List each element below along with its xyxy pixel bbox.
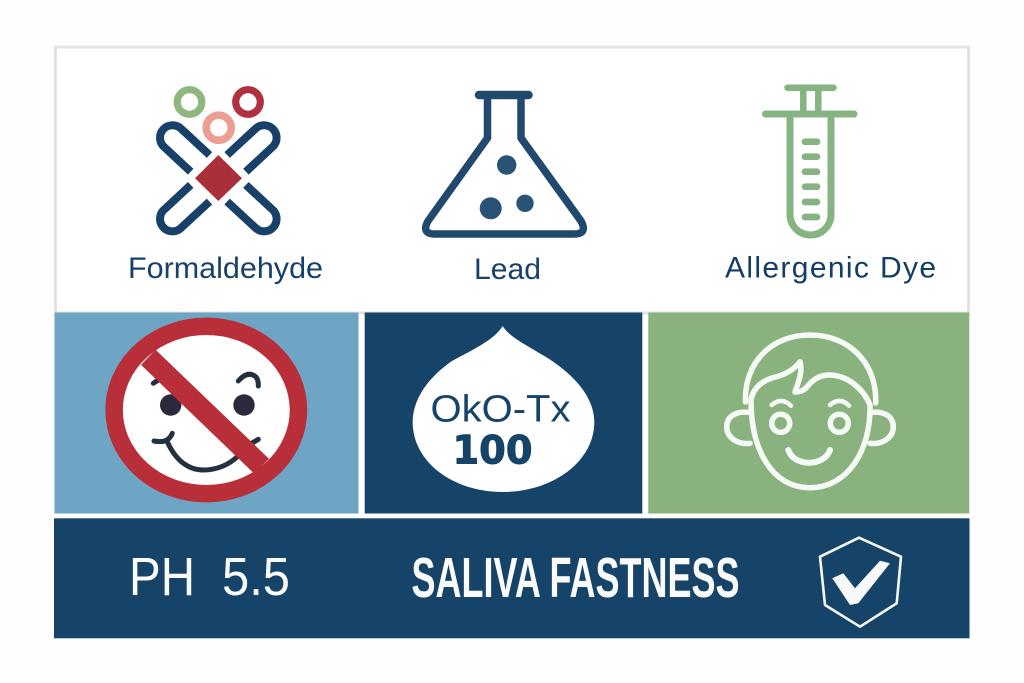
label: Lead: Lead [474,253,541,286]
brows [772,401,791,406]
icon: green ring [177,90,202,114]
icon: child face [727,335,893,488]
panel: no-face blue [54,312,358,514]
label: PH 5.5: 5.5 [222,547,290,607]
label: PH 5.5 [129,547,290,607]
label: PH 5.5: PH [129,547,195,607]
icon: prohibited smiley [114,326,298,494]
icon: pink ring [206,115,231,140]
smile [788,450,830,463]
panel: navy drop [365,312,642,514]
icon: white drop [413,326,594,492]
panel: bottom band [54,518,970,638]
label: Allergenic Dye: Allergenic Dye [725,252,936,284]
smiley features [153,374,258,470]
icon: crossed capsule arms [160,125,277,231]
panel: top white frame [56,47,968,313]
hair outline [745,335,876,403]
icon: red diamond [195,155,242,201]
prohibition ring and slash [114,326,298,494]
panel: green child [648,312,969,514]
label: SALIVA FASTNESS: SALIVA FASTNESS [412,546,740,610]
icon: flask [426,95,583,234]
icon group: formaldehyde [160,90,277,231]
hairline and face [751,362,870,488]
eyes [772,414,790,432]
icon: red ring [236,90,260,114]
ears [727,412,750,444]
icon: test tube [766,88,854,235]
label: OkO-Tx: OkO-Tx [430,389,570,431]
icon: shield check [820,538,901,627]
face disc [122,334,290,486]
label: Formaldehyde: Formaldehyde [128,252,323,285]
label: 100: 100 [452,428,532,473]
